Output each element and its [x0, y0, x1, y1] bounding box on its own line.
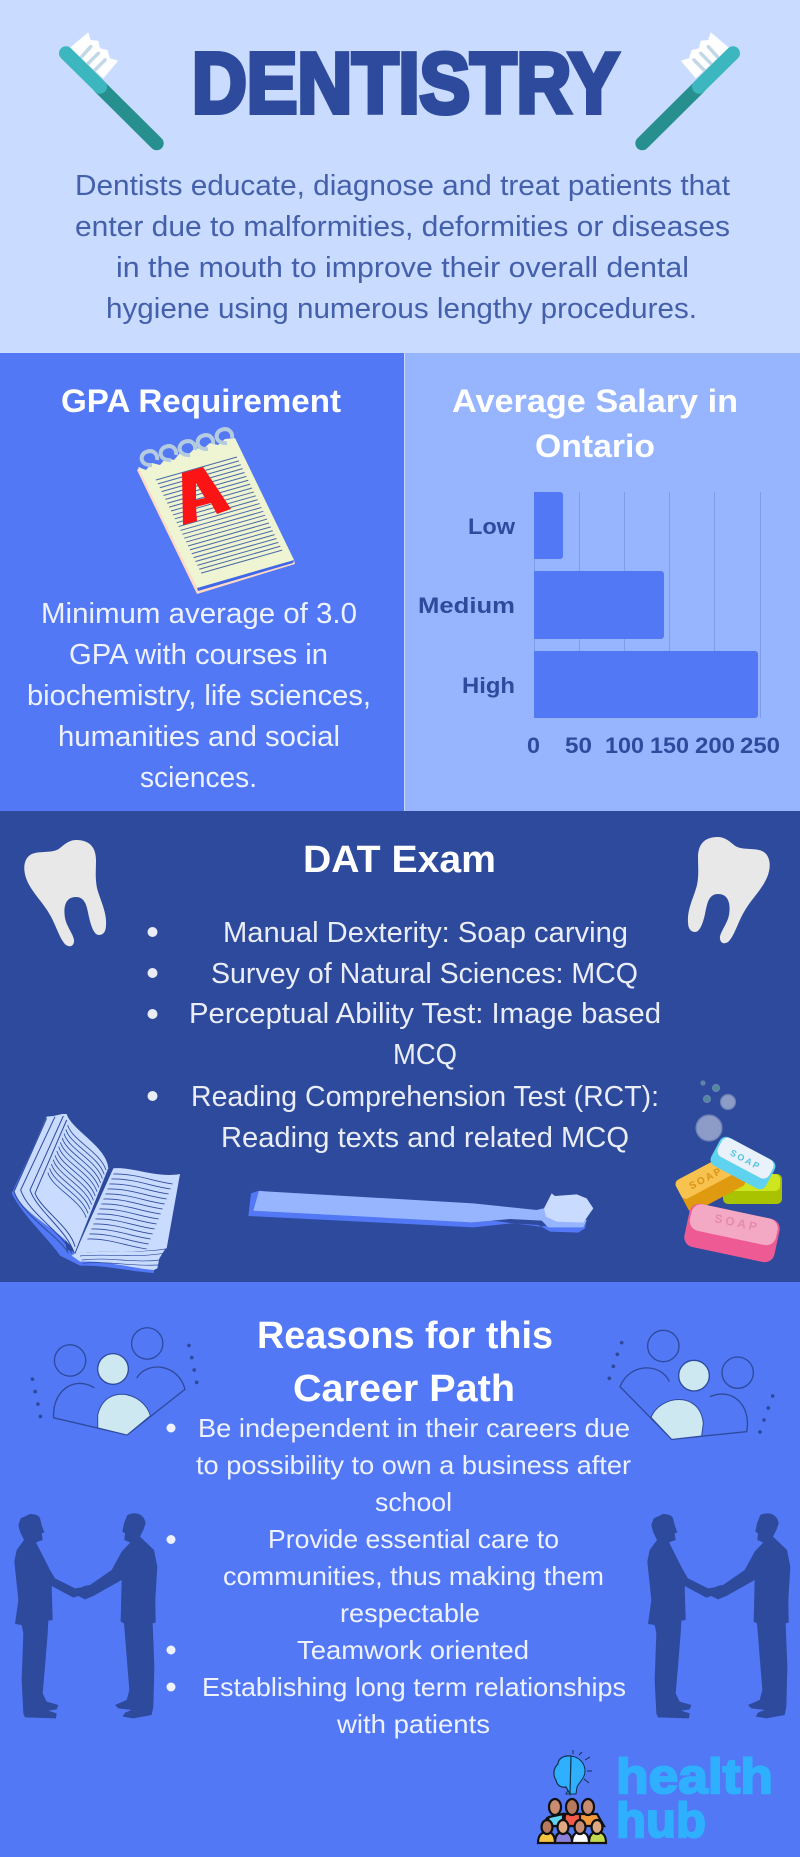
- logo wordmark: [616, 1750, 773, 1848]
- soap: yellow: SOAP: [688, 1165, 725, 1192]
- DAT exam list: MCQ: [393, 1039, 457, 1071]
- bar chart: salary: [418, 492, 780, 758]
- reasons list: school: [375, 1487, 452, 1517]
- reasons list: respectable: [340, 1598, 480, 1628]
- reasons list: Establishing long term relationships: [202, 1672, 626, 1702]
- heading: Average Salary in Ontario: Ontario: [535, 428, 655, 464]
- category labels: Low: [468, 514, 516, 539]
- reasons list: to possibility to own a business after: [196, 1450, 631, 1480]
- icon: toothbrush: [248, 1191, 593, 1233]
- axis labels: 100: [605, 733, 644, 758]
- title: DENTISTRY: [192, 36, 619, 132]
- axis labels: 50: [565, 733, 592, 758]
- heading: Reasons for this Career Path: [257, 1315, 553, 1410]
- soap: pink: [682, 1202, 782, 1264]
- category labels: [418, 514, 516, 698]
- soap: pink: SOAP: [713, 1211, 761, 1234]
- axis labels: 250: [740, 733, 780, 758]
- logo wordmark: health: [616, 1750, 773, 1804]
- icon: notebook with grade A: [137, 429, 295, 594]
- logo icon: brain bulb: [554, 1750, 592, 1794]
- GPA text: Minimum average of 3.0: [41, 598, 357, 630]
- axis labels: 0: [527, 733, 540, 758]
- icon: left tooth: [24, 840, 106, 946]
- icon: open book: [12, 1114, 180, 1273]
- logo: health hub: [538, 1750, 773, 1848]
- heading: Average Salary in Ontario: Average Salary in: [452, 383, 738, 419]
- bubbles: [696, 1081, 736, 1141]
- logo icon: group of people: [538, 1799, 606, 1843]
- GPA text: [27, 598, 371, 794]
- panel: average salary: [404, 353, 800, 811]
- GPA text: humanities and social: [58, 721, 340, 753]
- axis labels: 150: [650, 733, 689, 758]
- icon: left team: [25, 1314, 205, 1443]
- intro text: enter due to malformities, deformities or diseases: [75, 211, 730, 243]
- logo wordmark: hub: [616, 1794, 706, 1848]
- soap: cyan: SOAP: [728, 1148, 763, 1172]
- GPA text: sciences.: [140, 762, 257, 794]
- reasons list: communities, thus making them: [223, 1561, 604, 1591]
- icon: left toothbrush: [66, 32, 157, 143]
- axis labels: [527, 733, 780, 758]
- icon: right toothbrush: [642, 32, 733, 143]
- axis labels: 200: [695, 733, 735, 758]
- icon: left handshake silhouette: [14, 1513, 157, 1718]
- reasons list: Be independent in their careers due: [198, 1413, 630, 1443]
- reasons list: Provide essential care to: [268, 1524, 559, 1554]
- DAT exam list: Perceptual Ability Test: Image based: [189, 998, 661, 1030]
- reasons list: Teamwork oriented: [297, 1635, 529, 1665]
- heading: GPA Requirement: GPA Requirement: [61, 383, 341, 419]
- icon: right handshake silhouette: [647, 1513, 790, 1718]
- intro text: Dentists educate, diagnose and treat patients that: [75, 170, 730, 202]
- panel: DAT exam: [0, 811, 800, 1282]
- category labels: Medium: [418, 593, 515, 618]
- panel: reasons for this career path: [0, 1282, 800, 1857]
- GPA text: GPA with courses in: [69, 639, 328, 671]
- icon: soap bars and bubbles: [674, 1081, 782, 1264]
- panel: intro header: [0, 0, 800, 353]
- reasons list: [166, 1413, 631, 1739]
- soap: green: [723, 1174, 782, 1204]
- heading: Average Salary in Ontario: [452, 383, 738, 464]
- intro text: [75, 170, 730, 325]
- bar: low: [534, 492, 563, 559]
- panel: GPA requirement: [0, 353, 404, 811]
- reasons list: with patients: [336, 1709, 490, 1739]
- heading: Reasons for this Career Path: Career Path: [293, 1368, 515, 1410]
- bar: medium: [534, 571, 664, 639]
- intro text: in the mouth to improve their overall dental: [116, 252, 689, 284]
- icon: right tooth: [688, 837, 770, 943]
- GPA text: biochemistry, life sciences,: [27, 680, 371, 712]
- icon: right team: [607, 1330, 774, 1439]
- heading: Reasons for this Career Path: Reasons for this: [257, 1315, 553, 1357]
- DAT exam list: Manual Dexterity: Soap carving: [223, 917, 628, 949]
- intro text: hygiene using numerous lengthy procedures.: [106, 293, 697, 325]
- DAT exam list: Reading Comprehension Test (RCT):: [191, 1081, 659, 1113]
- DAT exam list: Survey of Natural Sciences: MCQ: [211, 958, 638, 990]
- soap: yellow: [674, 1152, 747, 1214]
- DAT exam list: [148, 917, 661, 1154]
- DAT exam list: Reading texts and related MCQ: [221, 1122, 629, 1154]
- category labels: High: [462, 673, 515, 698]
- soap: cyan: [708, 1134, 778, 1192]
- heading: DAT Exam: DAT Exam: [303, 839, 496, 881]
- bar: high: [534, 651, 758, 718]
